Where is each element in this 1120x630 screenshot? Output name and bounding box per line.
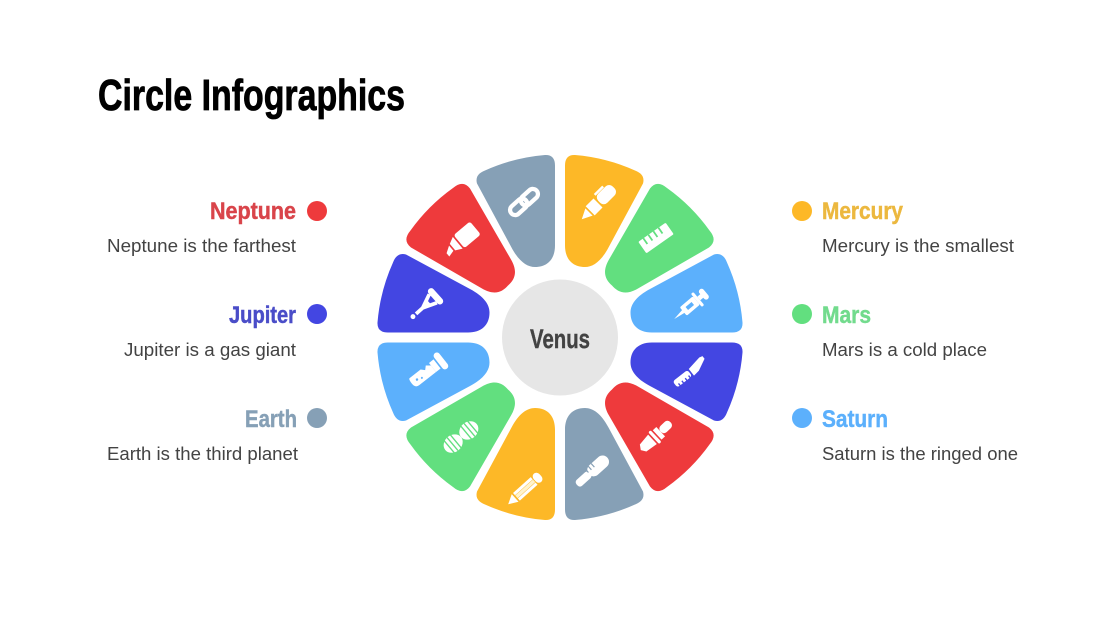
center circle: Venus <box>502 280 618 396</box>
icon: scalpel <box>671 355 709 388</box>
legend: Mercury: Mercury <box>822 198 904 225</box>
segment: yellow top <box>565 155 643 267</box>
legend: Neptune: Neptune <box>210 198 296 225</box>
segment: red upper left <box>406 184 515 292</box>
legend: Neptune <box>107 198 327 256</box>
center circle: Venus: Venus <box>530 324 590 354</box>
legend: Saturn: Saturn <box>822 406 888 433</box>
icon: DNA helix <box>440 417 482 457</box>
segment: grey-blue <box>565 408 643 520</box>
legend: Mars: Mars <box>822 302 871 329</box>
segment: indigo left <box>377 254 490 332</box>
circle wheel <box>377 155 743 520</box>
segment: sky blue left <box>377 342 490 421</box>
legend: Saturn: Saturn is the ringed one <box>822 444 1018 464</box>
legend: Jupiter: Jupiter <box>229 302 296 329</box>
legend: Jupiter: Jupiter is a gas giant <box>124 340 296 360</box>
legend: Mars: Mars is a cold place <box>822 340 987 360</box>
legend: Earth: Earth is the third planet <box>107 444 298 464</box>
icon: marker <box>441 221 481 259</box>
legend: Mercury <box>792 198 1014 256</box>
segment: sky blue <box>630 254 743 332</box>
legend: Earth <box>107 406 327 464</box>
segment: indigo <box>630 342 743 421</box>
icon: pencil <box>505 471 544 508</box>
icon: pen <box>575 181 618 224</box>
legend: Earth: Earth <box>245 406 297 433</box>
legend: Mars <box>792 302 987 360</box>
segment: green lower left <box>406 383 515 491</box>
segment: green <box>605 184 714 292</box>
segment: grey-blue upper left <box>477 155 555 267</box>
icon: ruler <box>638 223 674 253</box>
icon: dropper <box>635 417 676 456</box>
legend: Neptune: Neptune is the farthest <box>107 236 296 256</box>
icon: chain link <box>508 187 540 217</box>
legend: Saturn <box>792 406 1018 464</box>
icon: syringe <box>669 286 711 326</box>
segment: red <box>605 383 714 491</box>
icon: thermometer <box>573 453 612 490</box>
icon: crutch <box>405 287 445 326</box>
legend: Jupiter <box>124 302 327 360</box>
segment: yellow bottom <box>477 408 555 520</box>
legend: Mercury: Mercury is the smallest <box>822 236 1014 256</box>
icon: test tube <box>406 351 450 391</box>
title: Circle Infographics <box>98 71 405 120</box>
